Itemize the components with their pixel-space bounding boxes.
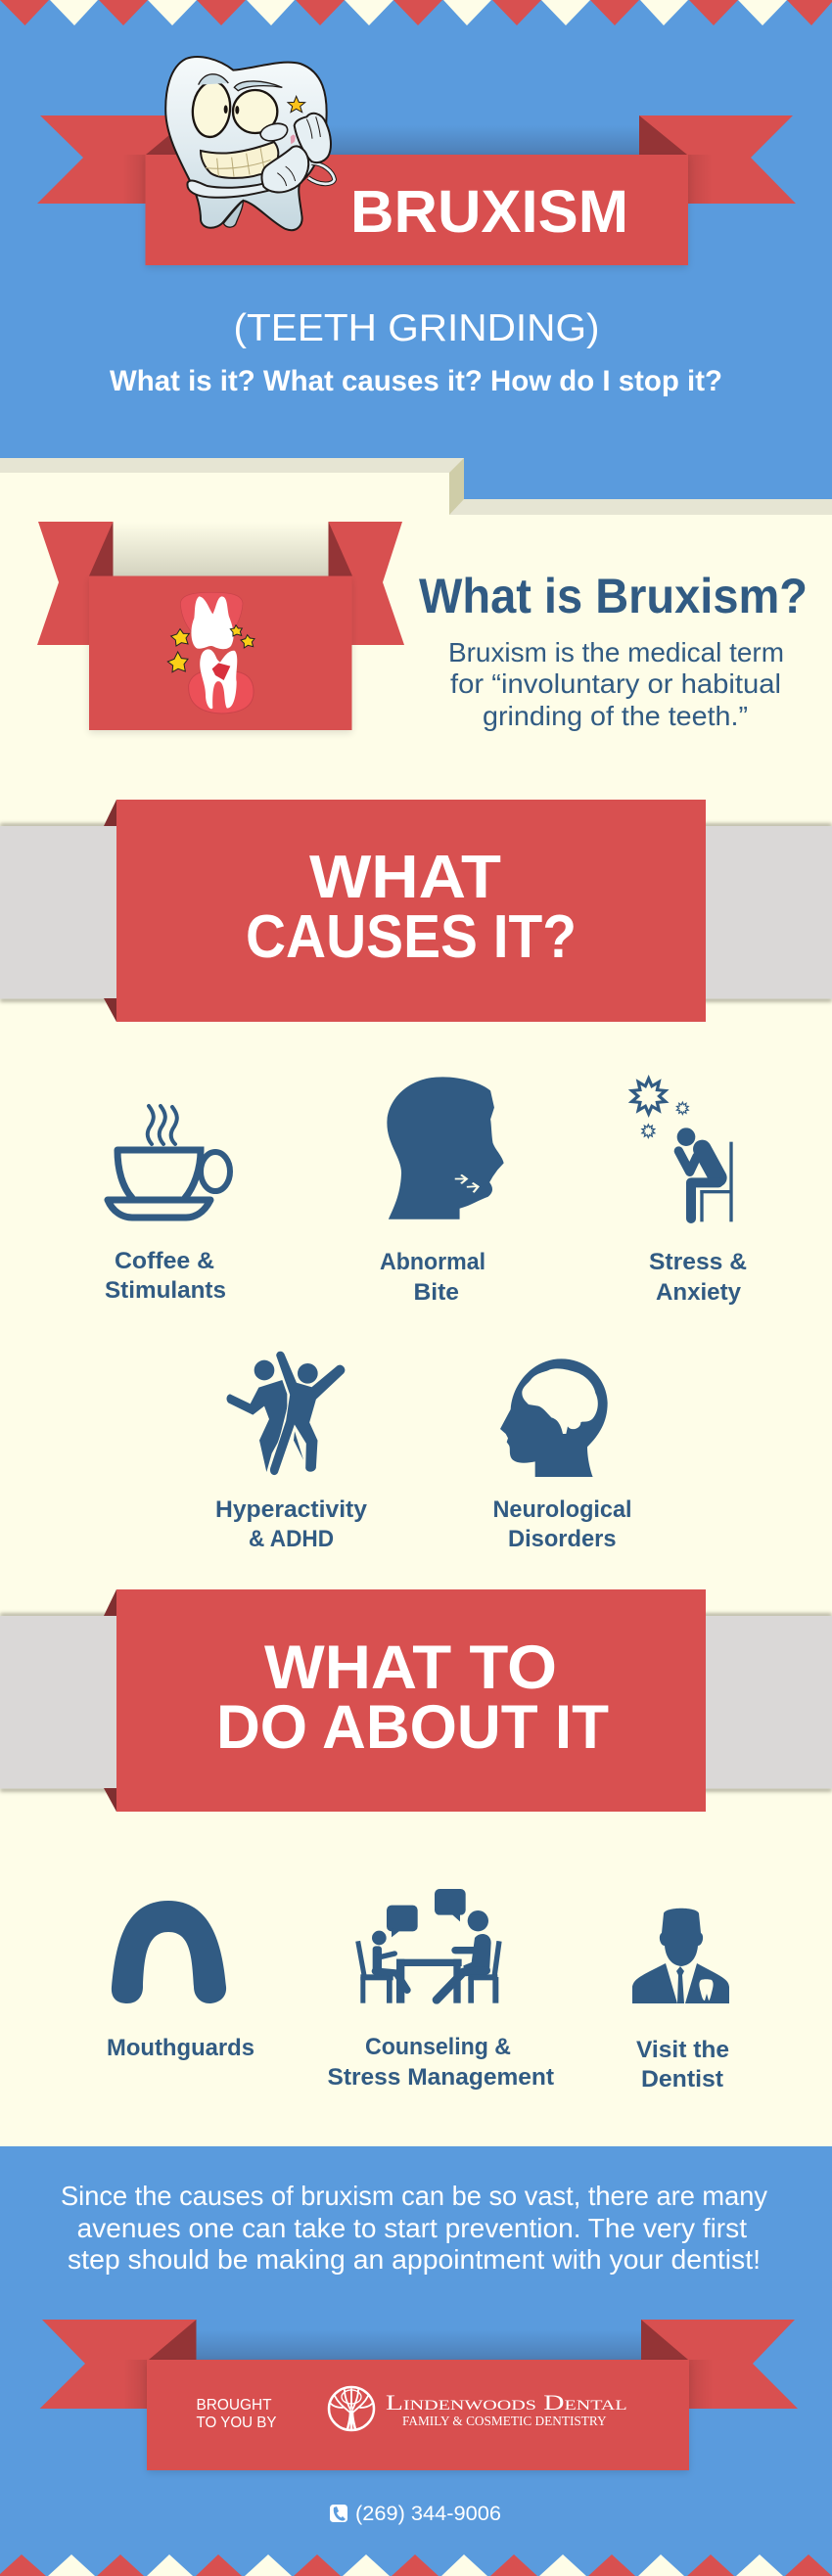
illustration: angry tooth mascot [165, 57, 335, 230]
phone number: (269) 344-9006 [355, 2503, 501, 2525]
icon: two people talking at a table [358, 1889, 499, 2003]
cause: hyperactivity and ADHD [215, 1351, 368, 1552]
icon: head profile with jaw arrows [387, 1077, 504, 1219]
remedy: mouthguards [107, 1901, 254, 2061]
cause: stress and anxiety: Stress & [649, 1249, 747, 1275]
cause: abnormal bite: Bite [413, 1279, 459, 1306]
section banner: what causes it: CAUSES IT? [246, 903, 577, 971]
cause: stress and anxiety [628, 1075, 747, 1306]
remedy: visit the dentist: Visit the [636, 2037, 729, 2063]
icon: mouthguard [112, 1901, 226, 2003]
icon: phone [330, 2505, 347, 2522]
section banner: what to do about it: DO ABOUT IT [216, 1693, 609, 1762]
section banner: what to do about it [0, 1589, 832, 1812]
brought to you by [196, 2397, 277, 2431]
cause: coffee and stimulants [105, 1106, 230, 1304]
logo: practice name: FAMILY & COSMETIC DENTISTRY [402, 2415, 607, 2429]
cause: stress and anxiety: Anxiety [656, 1279, 742, 1306]
closing paragraph [61, 2181, 767, 2275]
section banner: what to do about it: WHAT TO [264, 1633, 557, 1702]
title ribbon [37, 115, 796, 265]
remedy: mouthguards: Mouthguards [107, 2035, 254, 2061]
definition text: for “involuntary or habitual [450, 668, 781, 699]
section banner: what causes it [0, 800, 832, 1022]
closing paragraph: Since the causes of bruxism can be so vast, there are many [61, 2181, 767, 2211]
brought to you by: TO YOU BY [196, 2415, 277, 2431]
remedy: visit the dentist: Dentist [641, 2066, 723, 2093]
stepped cream panel edge [0, 458, 832, 515]
icon: two dancing figures [227, 1351, 346, 1476]
cause: neurological disorders: Neurological [493, 1496, 632, 1523]
icon: tooth grinding with stars [167, 592, 254, 713]
footer ribbon [40, 2320, 798, 2470]
remedy: visit the dentist [632, 1909, 729, 2093]
logo: practice name: Lindenwoods Dental [386, 2390, 627, 2415]
logo: practice name [386, 2390, 627, 2429]
cause: abnormal bite: Abnormal [380, 1249, 485, 1275]
top bunting [0, 0, 832, 25]
definition text: grinding of the teeth.” [483, 701, 748, 731]
cause: coffee and stimulants: Coffee & [115, 1248, 214, 1274]
remedy: counseling and stress management: Counseling & [365, 2034, 511, 2060]
icon: coffee cup [108, 1106, 230, 1218]
cause: coffee and stimulants: Stimulants [105, 1277, 226, 1304]
remedy: counseling and stress management: Stress Management [327, 2064, 554, 2091]
logo: tree emblem [329, 2387, 374, 2430]
section banner: what causes it: WHAT [309, 844, 501, 911]
cause: abnormal bite [380, 1077, 504, 1306]
subtitle: (TEETH GRINDING) [233, 307, 599, 349]
icon: dentist in suit [632, 1909, 729, 2003]
definition text: Bruxism is the medical term [448, 637, 784, 667]
heading: what is bruxism: What is Bruxism? [419, 569, 808, 623]
closing paragraph: avenues one can take to start prevention. The very first [77, 2213, 747, 2243]
title text: BRUXISM [350, 178, 628, 245]
closing paragraph: step should be making an appointment with your dentist! [68, 2244, 761, 2275]
cause: neurological disorders: Disorders [508, 1526, 617, 1552]
cause: neurological disorders [493, 1358, 632, 1552]
cause: hyperactivity and ADHD: Hyperactivity [215, 1496, 368, 1523]
bottom bunting [0, 2554, 832, 2576]
panel: what is bruxism ribbon [37, 522, 404, 730]
brought to you by: BROUGHT [196, 2397, 272, 2414]
icon: head with brain [500, 1358, 608, 1477]
definition text [448, 637, 784, 731]
cause: hyperactivity and ADHD: & ADHD [249, 1526, 334, 1552]
icon: seated person with stress stars [628, 1075, 733, 1221]
remedy: counseling and stress management [327, 1889, 554, 2091]
tagline: What is it? What causes it? How do I stop it? [110, 365, 722, 397]
